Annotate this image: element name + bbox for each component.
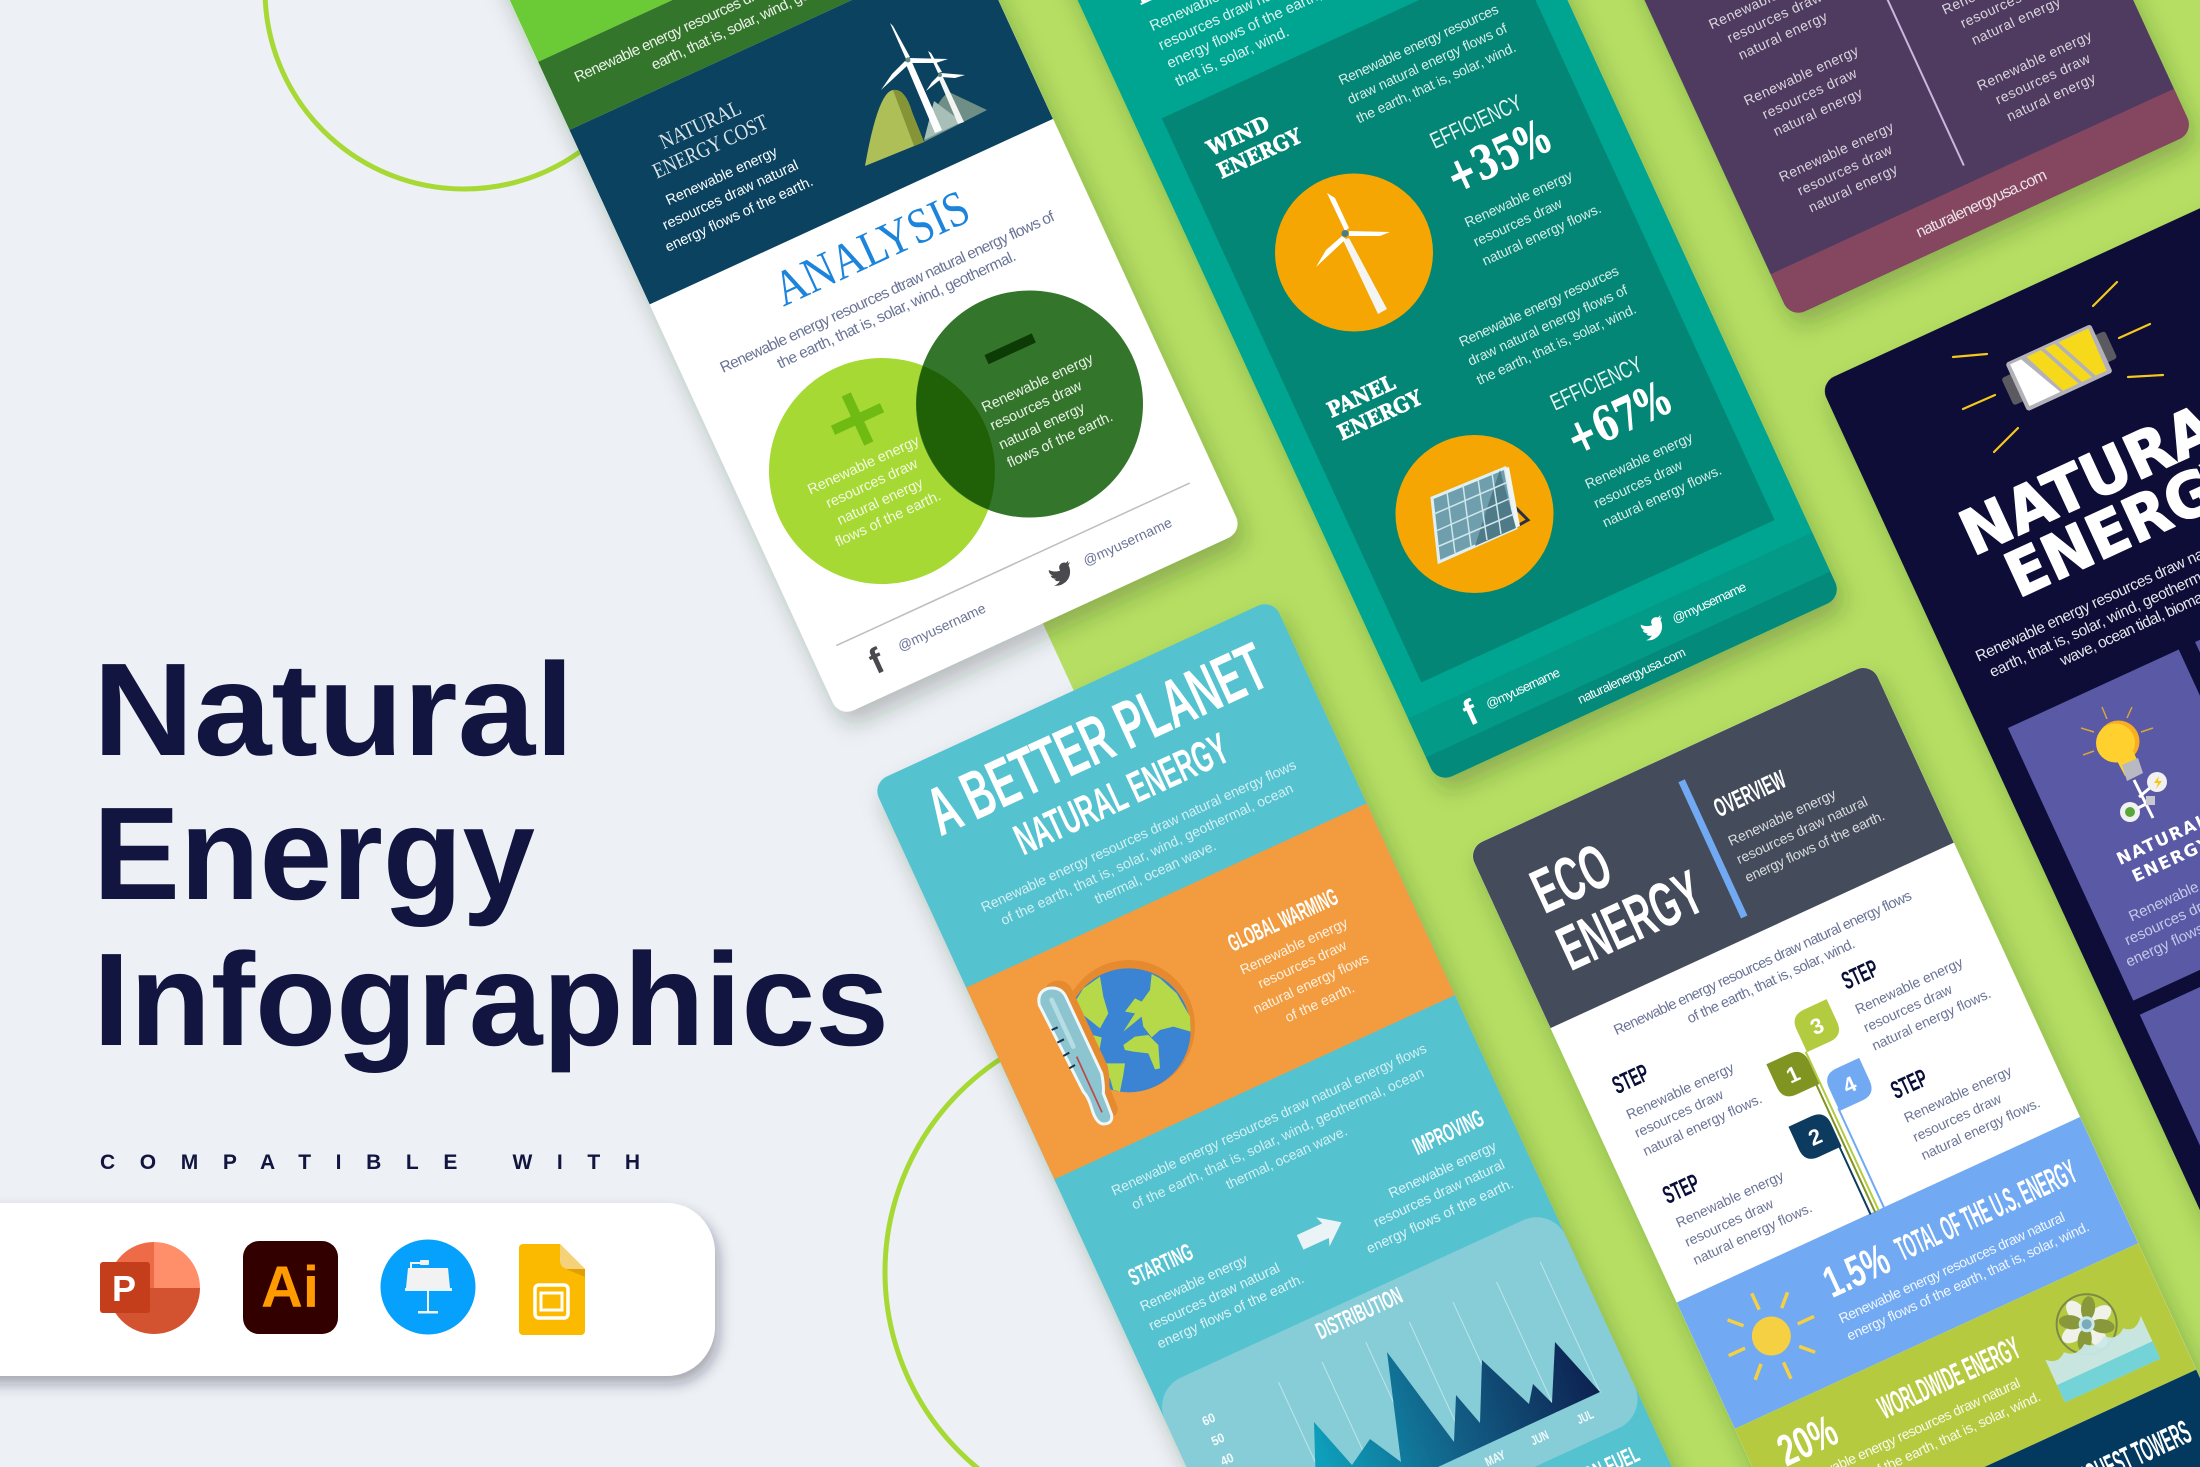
global warming text: natural energy flows [1251, 950, 1371, 1017]
left column text: resources draw [1760, 64, 1860, 122]
area chart [1314, 1342, 1600, 1467]
title: Infographics [93, 926, 889, 1073]
analysis text: the earth, that is, solar, wind, geothermal. [775, 248, 1019, 372]
stat: wind efficiency: resources draw [1471, 195, 1565, 249]
minus sign [984, 333, 1036, 364]
steps text: resources draw [1682, 1195, 1776, 1250]
stat: worldwide energy: WORLDWIDE ENERGY [1872, 1330, 2026, 1426]
improving text [1331, 1105, 1516, 1256]
light green section [483, 0, 941, 62]
icon: Google Slides [519, 1244, 585, 1335]
compatible with label: COMPATIBLE WITH [100, 1151, 640, 1174]
venn diagram [769, 290, 1143, 584]
intro text: of the earth, that is, solar, wind, geothermal, ocean [998, 780, 1295, 928]
step leaves: 3 [1806, 1012, 1828, 1040]
heading: wind energy: WIND [1202, 110, 1273, 161]
footer social: @myusername [1483, 665, 1562, 712]
navy section [569, 0, 1053, 304]
overview: resources draw natural [1734, 793, 1870, 867]
blue section [1677, 1117, 2138, 1429]
intro text: of the earth, that is, solar, wind. [1685, 936, 1858, 1027]
wind intro text: Renewable energy resources [1336, 1, 1501, 88]
inner panel: right [2195, 563, 2200, 915]
footer social: @myusername [1670, 579, 1749, 626]
footer social: f [1456, 691, 1485, 733]
right column text: resources draw [1993, 50, 2093, 107]
footer social [1456, 567, 1763, 753]
chart title: DISTRIBUTION [1312, 1282, 1407, 1345]
icon: wind turbine [1275, 174, 1433, 332]
minus text: natural energy [997, 400, 1088, 453]
improving text: Renewable energy [1386, 1138, 1499, 1201]
website: naturalenergyusa.com [1914, 167, 2050, 242]
starting text: resources draw natural [1146, 1259, 1282, 1333]
step leaves: 1 [1782, 1061, 1804, 1088]
stat: total of the U.S. energy: Renewable energy resources draw natural [1836, 1209, 2067, 1326]
left column text [1706, 0, 1913, 221]
chart axis labels [1200, 1266, 1596, 1467]
starting text: STARTING [1124, 1239, 1197, 1292]
cost text [645, 136, 816, 256]
orange section [966, 803, 1455, 1179]
heading: panel energy: PANEL [1323, 370, 1399, 422]
right column text [1904, 0, 2111, 130]
panel: purple card [1629, 0, 2194, 318]
icon: wind turbines and hills [865, 23, 987, 166]
second intro text: thermal, ocean wave. [1223, 1123, 1350, 1192]
steps text: STEP [1887, 1064, 1932, 1105]
intro text: Renewable energy resources draw natural energy flows [1611, 888, 1914, 1039]
left column text: resources draw [1795, 141, 1895, 198]
stat: wind efficiency: EFFICIENCY [1426, 89, 1526, 154]
heading: a better planet: A BETTER PLANET [915, 629, 1278, 850]
left column text: Renewable energy [1741, 42, 1861, 109]
plus text [805, 433, 947, 552]
inner panel: natural energy [2008, 649, 2200, 1001]
stat: panel efficiency [1543, 339, 1724, 530]
plus text: Renewable energy [805, 433, 923, 498]
footer bands [1408, 532, 1842, 783]
step leaves [1747, 997, 1890, 1163]
cost text: energy flows of the earth. [663, 174, 816, 256]
steps text: resources draw [1910, 1090, 2004, 1145]
green backdrop [756, 0, 2200, 1467]
intro text: thermal, ocean wave. [1092, 837, 1218, 907]
overview: OVERVIEW [1709, 764, 1791, 823]
starting text: Renewable energy [1137, 1251, 1250, 1314]
minus text: Renewable energy [979, 351, 1097, 416]
steps text: STEP [1608, 1059, 1653, 1100]
panel intro text: draw natural energy flows of [1465, 281, 1630, 369]
second intro text: of the earth, that is, solar, wind, geothermal, ocean [1129, 1064, 1426, 1212]
global warming text: GLOBAL WARMING [1224, 884, 1342, 957]
analysis text: Renewable energy resources dtraw natural energy flows of [718, 208, 1058, 377]
step stems [1797, 1049, 1884, 1214]
icon: PowerPoint: P [112, 1268, 136, 1309]
intro text [1147, 0, 1333, 90]
cost text: Renewable energy [664, 144, 781, 209]
steps text: resources draw [1632, 1086, 1726, 1141]
stat: panel efficiency: +67% [1557, 371, 1678, 465]
divider [1859, 0, 1964, 166]
stat: panel efficiency: Renewable energy [1582, 429, 1695, 492]
starting text: energy flows of the earth. [1154, 1270, 1306, 1352]
stat: wind efficiency: +35% [1437, 110, 1558, 204]
stat: panel efficiency: EFFICIENCY [1546, 351, 1646, 415]
grey header [1468, 663, 1954, 1028]
title: Energy [93, 780, 535, 927]
panel: teal wind and panel energy card [1057, 0, 1842, 783]
inner panel text [2106, 848, 2200, 971]
steps text: STEP [1659, 1169, 1704, 1210]
right column text: natural energy [2004, 69, 2098, 124]
footer band [1771, 89, 2194, 318]
distribution panel [1152, 1207, 1648, 1467]
heading: eco energy [1521, 800, 1714, 984]
steps text: Renewable energy [1624, 1059, 1736, 1122]
plus sign [822, 383, 893, 455]
icon: light bulb [2081, 707, 2167, 822]
title [93, 636, 889, 1073]
minus text [979, 351, 1122, 471]
stat: wind efficiency: natural energy flows. [1480, 200, 1604, 269]
starting text [1123, 1201, 1306, 1352]
improving text: resources draw natural [1371, 1156, 1507, 1230]
social handles: @myusername [1080, 514, 1175, 569]
panel: eco energy card [1468, 663, 2200, 1467]
arrow [1293, 1209, 1349, 1257]
improving text: IMPROVING [1409, 1105, 1488, 1161]
social handles: f [862, 639, 891, 682]
improving text: energy flows of the earth. [1364, 1175, 1516, 1256]
global warming text [1220, 883, 1380, 1036]
steps text: natural energy flows. [1918, 1094, 2042, 1163]
icon: Illustrator [243, 1241, 338, 1334]
minus text: flows of the earth. [1005, 409, 1116, 471]
title: Natural [93, 636, 574, 783]
global warming text: of the earth. [1282, 979, 1357, 1025]
heading: eco energy: ENERGY [1547, 858, 1714, 984]
icon: solar panel [1396, 435, 1554, 593]
stat: total of the U.S. energy [1814, 1148, 2102, 1344]
left column text: natural energy [1736, 8, 1830, 63]
social handles [862, 506, 1181, 682]
wind intro text: the earth, that is, solar, wind. [1353, 39, 1518, 126]
battery rays [1953, 282, 2163, 452]
natural energy cost heading: NATURAL [655, 95, 745, 154]
icon: Illustrator: Ai [261, 1255, 319, 1320]
navy section [1793, 1370, 2200, 1467]
panel: better planet card [872, 599, 1732, 1467]
steps text: Renewable energy [1901, 1062, 2014, 1126]
inner panel [1162, 0, 1775, 683]
icon: water wheel [2022, 1266, 2160, 1402]
left column text: natural energy [1771, 84, 1865, 139]
steps text: resources draw [1861, 980, 1955, 1035]
footer social: naturalenergyusa.com [1575, 644, 1688, 707]
footer divider [836, 483, 1190, 646]
analysis heading: ANALYSIS [765, 179, 978, 317]
icon: PowerPoint [100, 1242, 200, 1334]
steps text: STEP [1837, 954, 1883, 995]
chart axis labels: 50 [1209, 1430, 1227, 1449]
step leaves: 4 [1839, 1071, 1861, 1099]
heading: panel energy: ENERGY [1334, 384, 1427, 445]
plus text: flows of the earth. [833, 488, 944, 551]
plus text: natural energy [835, 475, 926, 529]
panel intro text: Renewable energy resources [1456, 262, 1621, 350]
steps text: Renewable energy [1673, 1167, 1786, 1231]
stat: panel efficiency: resources draw [1591, 456, 1686, 511]
overview [1708, 733, 1887, 885]
stat: total of the U.S. energy: 1.5% [1816, 1235, 1897, 1307]
cost text: resources draw natural [660, 158, 801, 234]
minus text: resources draw [988, 378, 1085, 434]
chart axis labels: JUL [1574, 1406, 1596, 1427]
right column text: Renewable energy [1974, 27, 2094, 94]
decorative ring: top [265, 0, 663, 189]
plus text: resources draw [824, 456, 921, 512]
icon: Keynote [380, 1240, 476, 1334]
steps text: Renewable energy [1852, 954, 1965, 1017]
heading: panel energy [1323, 362, 1427, 445]
chart axis labels: JUN [1528, 1427, 1551, 1448]
panel intro text: the earth, that is, solar, wind. [1474, 301, 1639, 388]
olive section [1735, 1243, 2196, 1467]
heading: wind energy [1202, 100, 1306, 184]
steps text: natural energy flows. [1690, 1199, 1814, 1268]
stat: worldwide energy [1765, 1322, 2044, 1467]
header divider [1678, 779, 1747, 918]
steps text: natural energy flows. [1869, 985, 1993, 1054]
heading: wind energy: ENERGY [1213, 123, 1306, 183]
chart gridlines [1279, 1262, 1600, 1467]
overview: energy flows of the earth. [1742, 807, 1887, 885]
chart axis labels: 60 [1200, 1410, 1218, 1429]
steps text: natural energy flows. [1640, 1090, 1764, 1159]
stat: panel efficiency: natural energy flows. [1600, 462, 1724, 530]
stat: total of the U.S. energy: energy flows of the earth, that is, solar, wind. [1844, 1218, 2092, 1344]
decorative ring: bottom [885, 1018, 1393, 1467]
icon: globe and thermometer [1039, 960, 1195, 1124]
step leaves: 2 [1804, 1123, 1826, 1151]
icon: sun [1709, 1274, 1834, 1398]
intro text [1973, 481, 2200, 701]
dark green section [538, 0, 973, 130]
intro text: Renewable energy resources draw natural energy flows [978, 756, 1298, 915]
left column text: natural energy [1806, 160, 1900, 215]
icon: battery [1996, 320, 2122, 416]
social handles: @myusername [895, 600, 988, 654]
wind intro text [1336, 1, 1518, 126]
stat: wind efficiency: Renewable energy [1462, 167, 1575, 230]
overview: Renewable energy [1725, 786, 1838, 849]
panel: white analysis card [483, 0, 1243, 717]
inner panel: lower left [2140, 936, 2200, 1269]
panel intro text [1456, 262, 1639, 388]
natural energy cost heading: ENERGY COST [648, 109, 772, 183]
global warming text: Renewable energy [1237, 914, 1350, 978]
subheading: natural energy: NATURAL ENERGY [1007, 724, 1236, 865]
second intro text: Renewable energy resources draw natural energy flows [1109, 1040, 1429, 1199]
intro text: that is, solar, wind. [1173, 23, 1292, 90]
software icons bar [0, 1203, 715, 1376]
stat: wind efficiency [1423, 77, 1604, 269]
panel: navy natural energy card [1820, 198, 2200, 1292]
steps text [1608, 915, 2043, 1268]
heading: eco energy: ECO [1521, 830, 1622, 927]
global warming text: resources draw [1255, 937, 1350, 991]
wind intro text: draw natural energy flows of [1345, 20, 1510, 107]
left column text: Renewable energy [1776, 118, 1896, 185]
top band text [545, 0, 933, 105]
